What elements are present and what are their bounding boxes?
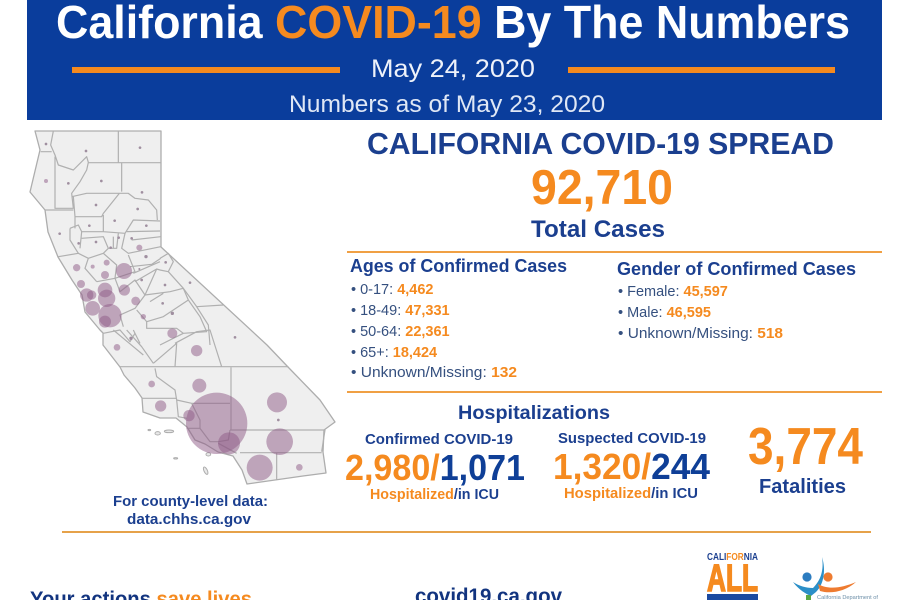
ages of confirmed cases: Ages of Confirmed Cases <box>350 256 567 276</box>
total cases: Total Cases <box>531 216 665 243</box>
California All logo: CALIFORNIA <box>707 552 758 563</box>
confirmed hospitalizations: Confirmed COVID-19 <box>365 432 513 448</box>
gender of confirmed cases: • Male: 46,595 <box>618 305 711 321</box>
total cases <box>531 161 673 243</box>
spread heading: CALIFORNIA COVID-19 SPREAD <box>367 126 834 161</box>
suspected hospitalizations: 1,320/244 <box>553 446 710 487</box>
ages of confirmed cases: • Unknown/Missing: 132 <box>351 365 517 381</box>
confirmed hospitalizations <box>345 432 525 503</box>
CDPH logo <box>793 557 878 600</box>
southern county borders <box>113 330 325 480</box>
total cases: 92,710 <box>531 161 673 215</box>
confirmed hospitalizations: Hospitalized/in ICU <box>370 487 499 503</box>
suspected hospitalizations: Hospitalized/in ICU <box>564 486 698 502</box>
ages of confirmed cases <box>350 256 567 381</box>
small county dots <box>45 143 280 421</box>
numbers-as-of date: Numbers as of May 23, 2020 <box>289 91 605 118</box>
confirmed hospitalizations: 2,980/1,071 <box>345 447 525 488</box>
fatalities <box>748 418 863 498</box>
gender of confirmed cases <box>617 259 856 342</box>
suspected hospitalizations <box>553 431 710 502</box>
ages of confirmed cases: • 65+: 18,424 <box>351 345 437 361</box>
California county map <box>30 131 335 484</box>
case bubbles south <box>114 328 303 481</box>
fatalities: 3,774 <box>748 418 863 476</box>
California All logo <box>707 552 758 600</box>
gender of confirmed cases: Gender of Confirmed Cases <box>617 259 856 279</box>
county data note: data.chhs.ca.gov <box>127 512 251 528</box>
county data note: For county-level data: <box>113 494 268 510</box>
gender of confirmed cases: • Female: 45,597 <box>618 284 728 300</box>
northern county borders <box>41 131 223 345</box>
suspected hospitalizations: Suspected COVID-19 <box>558 431 706 447</box>
ages of confirmed cases: • 50-64: 22,361 <box>351 324 450 340</box>
ages of confirmed cases: • 18-49: 47,331 <box>351 303 450 319</box>
county data note <box>113 494 268 528</box>
ages of confirmed cases: • 0-17: 4,462 <box>351 282 433 298</box>
fatalities: Fatalities <box>759 476 846 498</box>
state outline <box>30 131 335 484</box>
header banner <box>27 0 882 120</box>
channel islands <box>148 429 211 475</box>
case bubbles north <box>44 179 146 328</box>
gender of confirmed cases: • Unknown/Missing: 518 <box>618 326 783 342</box>
hospitalizations heading: Hospitalizations <box>458 403 610 424</box>
date: May 24, 2020 <box>371 55 535 83</box>
California All logo: ALL <box>707 558 758 600</box>
